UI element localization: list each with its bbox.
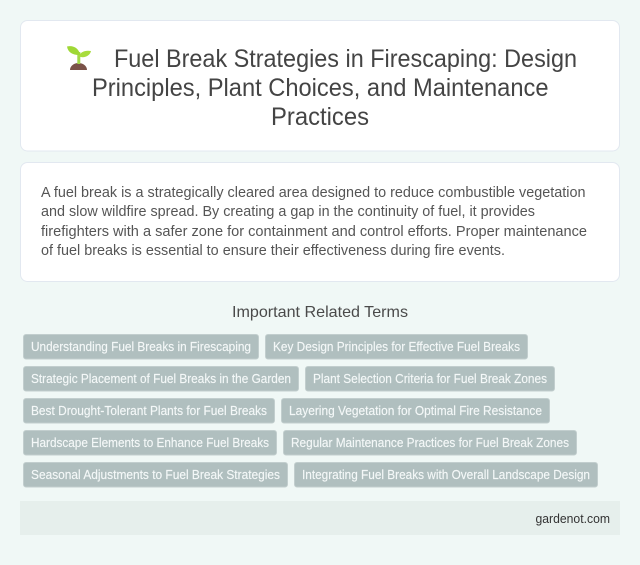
text block: description: of fuel breaks is essential to ensure their effectiveness during fire events. [41, 242, 505, 259]
title [92, 45, 577, 131]
tag: Plant Selection Criteria for Fuel Break Zones [313, 371, 547, 386]
tag: Key Design Principles for Effective Fuel Breaks [273, 339, 520, 354]
tag [294, 462, 598, 487]
panel: title card [20, 20, 620, 151]
text block: description: and slow wildfire spread. By creating a gap in the continuity of fuel, it provides [41, 203, 535, 220]
tag [306, 366, 554, 391]
tag [24, 334, 258, 359]
tag: Integrating Fuel Breaks with Overall Landscape Design [302, 467, 590, 482]
text block: description [41, 184, 587, 259]
tag: Regular Maintenance Practices for Fuel Break Zones [291, 435, 569, 450]
panel: description [20, 162, 620, 282]
title: Principles, Plant Choices, and Maintenance [92, 74, 548, 102]
footer credit: gardenot.com [536, 511, 610, 526]
tag [284, 430, 576, 455]
icon: seedling [67, 46, 91, 70]
footer [20, 501, 620, 535]
tag [24, 430, 276, 455]
tag: Hardscape Elements to Enhance Fuel Breaks [31, 435, 269, 450]
tag list [24, 334, 598, 487]
tag: Strategic Placement of Fuel Breaks in the Garden [31, 371, 291, 386]
tag: Best Drought-Tolerant Plants for Fuel Breaks [31, 403, 267, 418]
tag [24, 366, 298, 391]
title: Practices [271, 103, 369, 131]
title: Fuel Break Strategies in Firescaping: Design [114, 45, 577, 73]
tag [266, 334, 528, 359]
tag [282, 398, 550, 423]
tag: Layering Vegetation for Optimal Fire Resistance [289, 403, 542, 418]
tag [24, 398, 274, 423]
heading: related terms: Important Related Terms [232, 304, 408, 321]
tag: Understanding Fuel Breaks in Firescaping [31, 339, 251, 354]
tag [24, 462, 288, 487]
text block: description: firefighters with a safer zone for containment and control efforts. Proper maintenance [41, 223, 587, 240]
text block: description: A fuel break is a strategically cleared area designed to reduce combustible vegetation [41, 184, 586, 201]
tag: Seasonal Adjustments to Fuel Break Strategies [31, 467, 280, 482]
